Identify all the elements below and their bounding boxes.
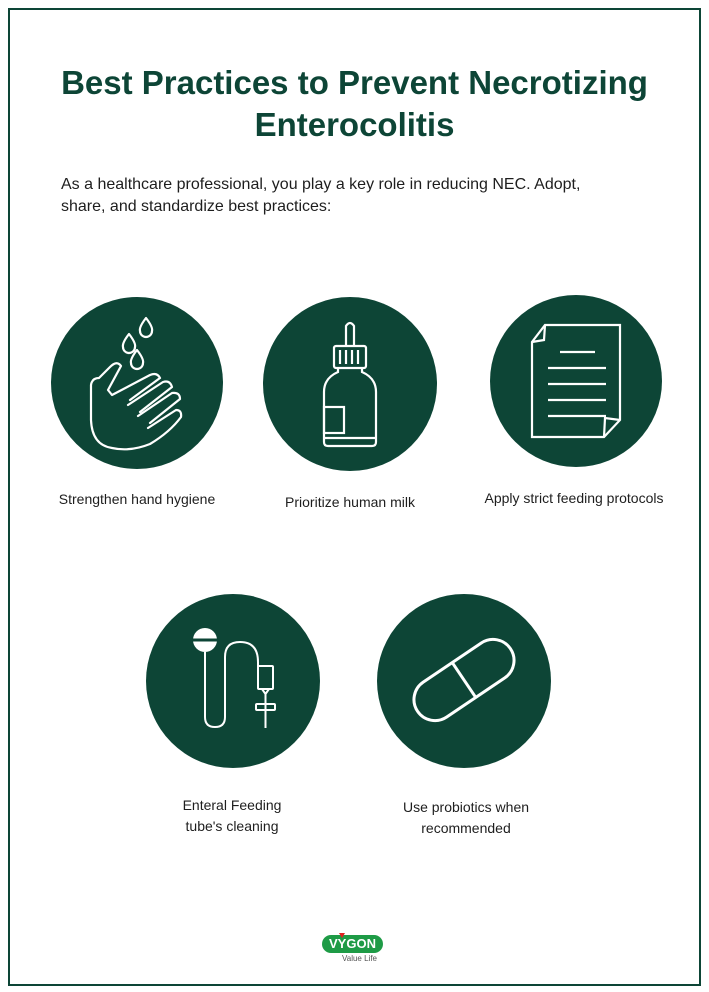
label: tube cleaning: tube's cleaning (186, 818, 278, 834)
title: Enterocolitis (255, 106, 454, 143)
label: hand hygiene: Strengthen hand hygiene (59, 491, 215, 507)
label: tube cleaning (183, 797, 281, 834)
label: probiotics (403, 799, 529, 836)
logo: VYGON (329, 936, 376, 951)
label: probiotics: recommended (421, 820, 511, 836)
label: feeding protocols: Apply strict feeding protocols (485, 490, 663, 506)
logo (322, 933, 383, 963)
label: tube cleaning: Enteral Feeding (183, 797, 281, 813)
logo: Value Life (342, 954, 377, 963)
icon: feeding tube (146, 594, 320, 768)
icon: hand hygiene (51, 297, 223, 469)
label: human milk: Prioritize human milk (285, 494, 415, 510)
title: Best Practices to Prevent Necrotizing (61, 64, 648, 101)
intro text: share, and standardize best practices: (61, 198, 331, 215)
icon: capsule (377, 594, 551, 768)
intro text (61, 176, 580, 215)
title (61, 64, 648, 143)
label: probiotics: Use probiotics when (403, 799, 529, 815)
intro text: As a healthcare professional, you play a key role in reducing NEC. Adopt, (61, 176, 580, 193)
icon: document (490, 295, 662, 467)
icon: bottle (263, 297, 437, 471)
